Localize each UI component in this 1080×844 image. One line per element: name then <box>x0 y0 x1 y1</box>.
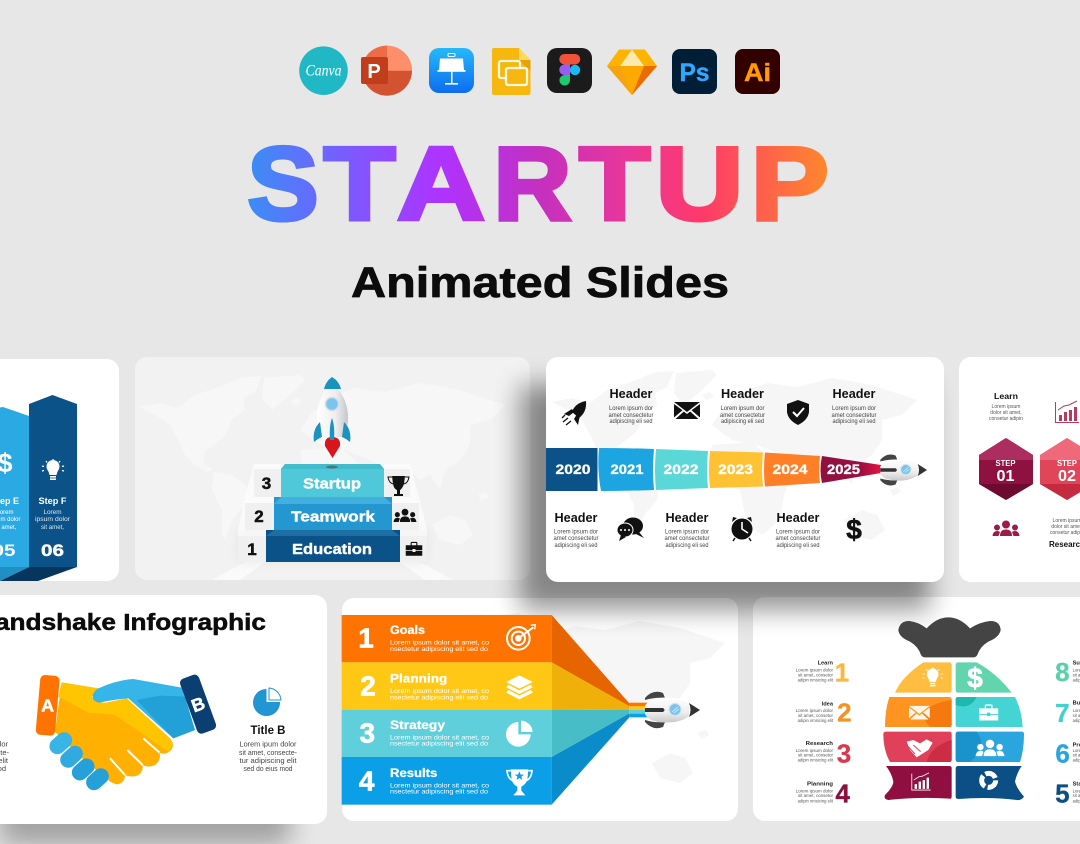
timeline band: 2024 <box>772 461 808 477</box>
bag top <box>898 617 1001 657</box>
icon: rocket <box>562 401 586 425</box>
row: Results: Results <box>390 766 437 780</box>
item 5 <box>1055 778 1080 808</box>
row: Results: Lorem ipsum dolor sit amet, co <box>390 782 489 789</box>
icon: trophy <box>388 476 409 496</box>
panel: handshake <box>0 595 327 824</box>
row: Planning: nsectetur adipiscing elit sed do <box>390 694 488 701</box>
item: Learn: sit amet, consetur <box>798 672 834 677</box>
segment: envelope <box>885 697 952 727</box>
text block: bottom 2: Lorem ipsum dor <box>665 530 709 536</box>
text block: bottom 2: amet consectetur <box>664 536 710 542</box>
timeline band: 2025 <box>827 461 860 477</box>
title: R <box>493 127 571 243</box>
title: S <box>247 127 319 243</box>
text block: bottom 1: Header <box>554 511 598 525</box>
icon: Sketch <box>607 50 657 95</box>
segment: dollar: $ <box>967 663 983 694</box>
icon: dollar: $ <box>846 514 862 545</box>
cuff B: B <box>189 693 208 716</box>
cuff A <box>35 675 60 736</box>
rocket <box>645 692 700 728</box>
text block: Title B: sit amet, consecte- <box>239 748 297 757</box>
text block: bottom 3 <box>776 511 820 549</box>
cast shadow of timeline panel <box>520 385 930 610</box>
text block: Title B: sed do eius mod <box>244 764 292 773</box>
item: Research: sit amet, consetur <box>798 753 834 758</box>
subtitle: Animated Slides <box>351 259 729 307</box>
title: P <box>751 127 829 243</box>
world map <box>552 370 917 540</box>
row: Planning <box>342 662 552 710</box>
text block: bottom 3: amet consectetur <box>776 536 820 542</box>
text block: bottom 1: amet consectetur <box>554 536 598 542</box>
item: Research: adipin nmsicing elit <box>798 758 834 763</box>
panel: timeline <box>546 357 944 582</box>
text block: bottom 2: adipiscing eli sed <box>666 543 708 549</box>
panel: money bag (background) <box>753 597 1080 821</box>
text block: bottom 3: adipiscing eli sed <box>776 543 820 549</box>
item: Planning <box>796 778 850 808</box>
row: Planning: 2 <box>360 671 376 702</box>
row: Goals: Lorem ipsum dolor sit amet, co <box>390 640 489 647</box>
hexagon: step 01 <box>979 438 1033 500</box>
text block: bottom 2: Header <box>666 511 709 525</box>
item: Idea: sit amet, consetur <box>798 713 834 718</box>
step numbers: 1 <box>247 540 257 559</box>
item: Research: 3 <box>837 738 851 768</box>
world map <box>360 613 725 783</box>
icon: Illustrator: Ai <box>744 59 771 87</box>
row: Strategy: 3 <box>360 717 375 748</box>
item: Idea: adipin nmsicing elit <box>798 718 834 723</box>
text block: top 2: Lorem ipsum dor <box>720 406 764 412</box>
text block: bottom 1 <box>554 511 598 549</box>
item: Idea <box>796 698 852 728</box>
timeline band: 2021 <box>610 461 644 477</box>
text block: Title B <box>239 725 297 773</box>
blue fingers <box>46 729 112 794</box>
step: Education: Education <box>292 541 372 558</box>
text block: top 2: adipiscing eli sed <box>721 419 764 425</box>
text block: bottom 3: Header <box>776 511 820 525</box>
icon: alarm clock <box>732 517 752 541</box>
segment: team <box>956 732 1024 762</box>
item 7 <box>1055 698 1080 728</box>
money bag <box>796 617 1080 808</box>
item: Learn: Learn <box>818 660 834 666</box>
icon: Canva <box>299 46 348 95</box>
world map <box>140 375 505 545</box>
step: Education <box>266 530 400 562</box>
icon: Photoshop: Ps <box>680 59 710 87</box>
block: Learn: Learn <box>994 392 1018 401</box>
title: U <box>656 127 744 243</box>
item: Planning: 4 <box>835 778 850 808</box>
segment: chart <box>885 766 952 800</box>
text block: top 2 <box>720 387 765 425</box>
hexagon: step 02: STEP <box>1057 459 1078 468</box>
text block: top 3 <box>832 387 876 425</box>
step: Startup: Startup <box>303 476 361 492</box>
item: Research <box>796 738 851 768</box>
row: Strategy: Lorem ipsum dolor sit amet, co <box>390 734 489 741</box>
icon: Canva: Canva <box>306 62 342 80</box>
timeline band: 2022 <box>664 461 699 477</box>
timeline band: 2023 <box>718 461 753 477</box>
hexagon: step 02: 02 <box>1058 468 1076 485</box>
item 5: 5 <box>1055 778 1070 808</box>
hexagon: step 02 <box>1040 438 1080 500</box>
segment: briefcase <box>956 697 1023 727</box>
text block: bottom 2 <box>664 511 710 549</box>
item 8 <box>1055 657 1080 687</box>
icon: briefcase <box>406 542 422 556</box>
icon: Figma <box>547 48 592 93</box>
text block: bottom 1: Lorem ipsum dor <box>554 530 598 536</box>
icon: envelope <box>674 402 700 419</box>
row: Goals: Goals <box>390 623 425 637</box>
panel: hexagon steps <box>959 357 1080 582</box>
text block: top 1: Header <box>610 387 653 401</box>
item 6: 6 <box>1055 739 1070 769</box>
icon: PowerPoint <box>361 46 412 96</box>
text block: top 1 <box>608 387 654 425</box>
cast shadow of handshake panel <box>0 620 290 844</box>
text block: Title B: tur adipiscing elit <box>240 756 297 765</box>
text block: Title A (cropped) <box>0 740 9 773</box>
left list <box>796 658 852 808</box>
block: Learn: consetur adipin <box>989 416 1023 422</box>
step: Teamwork: Teamwork <box>291 508 376 526</box>
segment: cycle <box>956 766 1024 800</box>
icon: Photoshop <box>672 49 717 94</box>
item: Idea: Lorem ipsum dolor <box>796 708 834 713</box>
item 8: 8 <box>1055 657 1070 687</box>
icon: Illustrator <box>735 49 780 94</box>
panel: step columns <box>0 359 119 581</box>
step F column: sit amet, <box>41 525 64 531</box>
text block: top 2: amet consectetur <box>720 413 765 419</box>
icon: team <box>992 520 1020 536</box>
icon: Google Slides <box>492 48 530 95</box>
text block: bottom 3: Lorem ipsum dor <box>776 530 820 536</box>
item: Learn: 1 <box>835 658 849 688</box>
funnel and list <box>342 615 649 805</box>
icon: pie chart <box>506 721 533 747</box>
segment: lightbulb <box>895 662 952 693</box>
cuff A: A <box>41 696 54 716</box>
icon: team <box>394 509 416 522</box>
title: T <box>579 127 650 243</box>
item: Research: Research <box>806 741 834 747</box>
item: Learn: Lorem ipsum dolor <box>796 668 834 673</box>
block: Learn: dolor sit amet, <box>990 410 1022 416</box>
hexagon: step 01: STEP <box>996 459 1016 468</box>
icon: PowerPoint: P <box>367 61 381 83</box>
row: Planning: Planning <box>390 671 447 685</box>
timeline band <box>546 448 881 491</box>
icon: target <box>507 625 535 650</box>
item: Planning: Planning <box>807 782 834 788</box>
step F column: Step F <box>38 496 67 506</box>
stairs base <box>212 464 453 580</box>
item: Planning: sit amet, consetur <box>798 793 834 798</box>
block: Learn <box>989 392 1023 422</box>
step F column: 06 <box>41 541 64 560</box>
item 7: 7 <box>1055 698 1070 728</box>
icon: chart <box>1055 401 1079 423</box>
segment: dollar <box>956 662 1012 694</box>
step numbers: 2 <box>254 507 264 526</box>
item: Learn: adipin nmsicing elit <box>798 677 834 682</box>
item: Learn <box>796 658 849 688</box>
icon: shield <box>787 400 809 425</box>
yellow hand <box>55 682 173 784</box>
step E column <box>0 407 29 581</box>
row: Goals <box>342 615 552 662</box>
panel: startup stairs <box>135 357 530 580</box>
illustration: handshake <box>35 673 217 794</box>
icon: chat <box>617 518 644 541</box>
item: Planning: adipin nmsicing elit <box>798 798 834 803</box>
block: Learn: Lorem ipsum <box>992 404 1020 410</box>
row: Strategy: Strategy <box>390 718 445 732</box>
segment: handshake <box>883 732 952 762</box>
software logo row <box>299 46 780 96</box>
text block: Title B: Lorem ipum dolor <box>240 740 297 748</box>
step F column: ipsum dolor <box>35 517 70 523</box>
text block: top 3: Lorem ipsum dor <box>832 406 876 412</box>
item: Idea: Idea <box>822 701 834 707</box>
rocket <box>880 455 927 485</box>
text block: top 1: adipiscing eli sed <box>610 419 652 425</box>
title: A <box>397 127 485 243</box>
panel: rocket funnel <box>342 598 738 821</box>
block: Research <box>1049 518 1080 549</box>
icon: Keynote <box>429 48 474 93</box>
blue hand <box>93 679 195 738</box>
row: Results <box>342 757 552 805</box>
item: Idea: 2 <box>837 698 852 728</box>
step: Teamwork <box>274 497 392 530</box>
item: Research: Lorem ipsum dolor <box>796 748 834 753</box>
rocket <box>314 377 350 458</box>
step numbers <box>247 474 271 559</box>
icon: layers <box>506 675 533 699</box>
row: Goals: 1 <box>358 623 374 654</box>
row: Strategy: nsectetur adipiscing elit sed do <box>390 741 488 748</box>
text block: top 3: amet consectetur <box>832 413 876 419</box>
row funnel sides <box>552 615 649 805</box>
text block: bottom 1: adipiscing eli sed <box>554 543 598 549</box>
row: Planning: Lorem ipsum dolor sit amet, co <box>390 688 489 695</box>
text block: top 3: Header <box>832 387 876 401</box>
step F column <box>0 395 77 581</box>
text block: Title B: Title B <box>250 725 286 737</box>
icon: pie chart <box>253 688 281 716</box>
text block: top 1: Lorem ipsum dor <box>609 406 653 412</box>
text block: top 1: amet consectetur <box>608 413 654 419</box>
right list <box>1055 657 1080 808</box>
step F column: Lorem <box>44 510 62 516</box>
row: Results: nsectetur adipiscing elit sed do <box>390 789 488 796</box>
item 6 <box>1055 739 1080 769</box>
timeline band: 2020 <box>556 461 591 477</box>
title: T <box>324 127 395 243</box>
item: Planning: Lorem ipsum dolor <box>796 788 834 793</box>
row: Results: 4 <box>359 766 375 797</box>
row: Goals: nsectetur adipiscing elit sed do <box>390 646 488 653</box>
text block: top 2: Header <box>721 387 764 401</box>
cuff B <box>179 673 217 735</box>
icon: trophy <box>507 769 532 795</box>
text block: top 3: adipiscing eli sed <box>832 419 876 425</box>
row: Strategy <box>342 710 552 757</box>
step: Startup <box>281 464 384 497</box>
hexagon: step 01: 01 <box>996 468 1015 485</box>
step numbers: 3 <box>262 474 271 493</box>
